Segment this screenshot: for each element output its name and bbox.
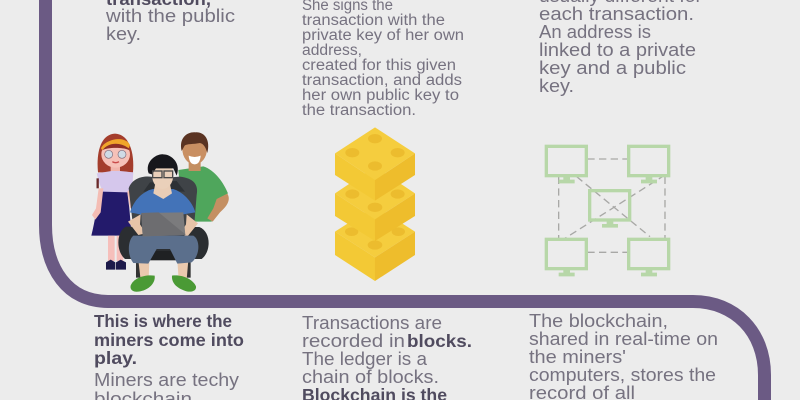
illustration: computer network bbox=[546, 146, 669, 276]
man on chair with laptop bbox=[118, 154, 209, 292]
text block: address: key and a public bbox=[539, 57, 686, 78]
text block: blocks: blocks. bbox=[407, 331, 472, 351]
text block: shared ledger: computers, stores the bbox=[529, 364, 716, 385]
text block: shared ledger: The blockchain, bbox=[529, 310, 668, 331]
text block: miners bbox=[94, 311, 244, 400]
text block: blocks: chain of blocks. bbox=[302, 366, 439, 387]
top brick bbox=[335, 127, 415, 201]
text block: address: An address is bbox=[539, 21, 651, 42]
text block: shared ledger: shared in real-time on bbox=[529, 328, 718, 349]
text block: signing bbox=[302, 0, 464, 119]
text block: signing: the transaction. bbox=[302, 102, 416, 119]
text block: signing: transaction with the bbox=[302, 12, 445, 29]
text block: public key bbox=[105, 0, 235, 44]
text block: signing: her own public key to bbox=[302, 87, 459, 104]
monitor stands bbox=[559, 176, 657, 276]
woman bbox=[91, 134, 134, 270]
text block: signing: created for this given bbox=[302, 57, 456, 74]
text block: miners: play. bbox=[94, 348, 137, 368]
text block: blocks bbox=[302, 312, 472, 400]
text block: address: linked to a private bbox=[539, 39, 696, 60]
dashed connections bbox=[559, 159, 665, 252]
text block: signing: address, bbox=[302, 42, 362, 59]
text block: address: each transaction. bbox=[539, 3, 694, 24]
text block: signing: private key of her own bbox=[302, 27, 464, 44]
text block: public key: with the public bbox=[105, 5, 235, 26]
text block: public key: key. bbox=[106, 23, 141, 44]
text block: miners: miners come into bbox=[94, 330, 244, 350]
illustration: miners bbox=[91, 132, 229, 292]
bottom brick bbox=[335, 206, 415, 281]
text block: blocks: Transactions are bbox=[302, 312, 442, 333]
text block: miners: This is where the bbox=[94, 311, 232, 331]
middle brick bbox=[335, 167, 415, 241]
text block: blocks: recorded in bbox=[302, 330, 405, 351]
text block: address bbox=[539, 0, 702, 96]
text block: shared ledger: the miners' bbox=[529, 346, 626, 367]
text block: address: key. bbox=[539, 75, 574, 96]
man in green shirt bbox=[178, 132, 229, 222]
text block: signing: transaction, and adds bbox=[302, 72, 462, 89]
illustration: stacked yellow bricks bbox=[335, 127, 415, 281]
text block: miners: Miners are techy bbox=[94, 369, 240, 390]
text block: shared ledger bbox=[529, 310, 718, 400]
monitors bbox=[546, 146, 669, 269]
text block: blocks: The ledger is a bbox=[302, 348, 428, 369]
